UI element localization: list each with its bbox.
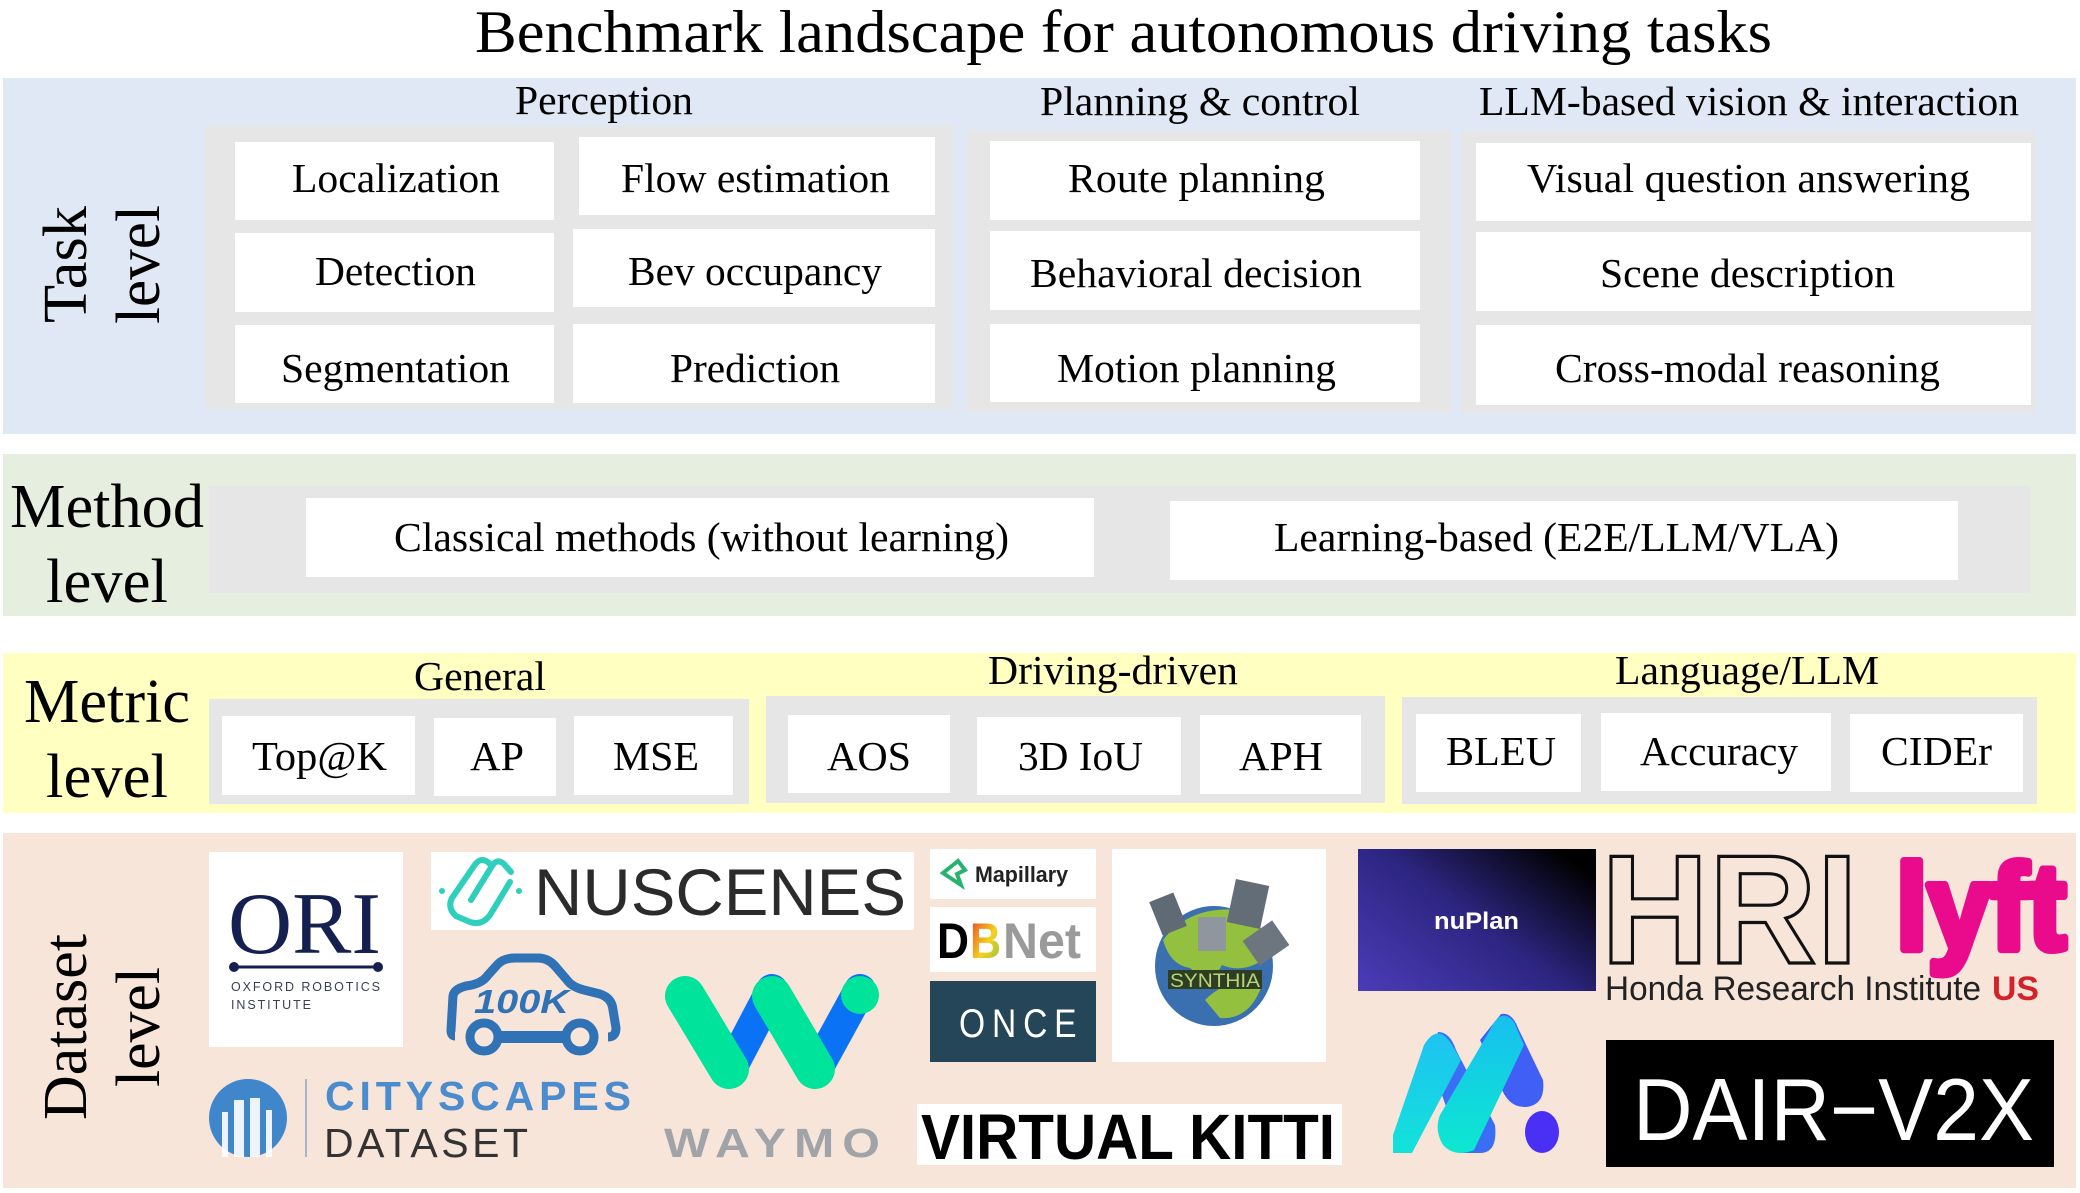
- logo: ORI: [209, 852, 403, 1047]
- group: perception: [206, 77, 953, 409]
- group: LLM-based vision and interaction: Cross-modal reasoning: [1555, 345, 1940, 391]
- group: driving-driven metrics: AOS: [827, 733, 911, 779]
- group: perception: Bev occupancy: [628, 248, 882, 294]
- task level label: [32, 205, 173, 324]
- logo: Waymo: WAYMO: [664, 1120, 880, 1166]
- dataset level label: level: [105, 967, 173, 1087]
- group: language metrics: BLEU: [1446, 728, 1556, 774]
- metric level label: Metric: [24, 668, 190, 736]
- logo: Cityscapes: [209, 1073, 631, 1166]
- panel: metric level: [3, 647, 2076, 813]
- method level label: [10, 473, 204, 616]
- logo: ORI: OXFORD ROBOTICS: [231, 980, 380, 994]
- logo: nuScenes: NUSCENES: [534, 855, 906, 929]
- title: Benchmark landscape for autonomous driving tasks: [475, 0, 1772, 65]
- box: classical methods: Classical methods (without learning): [394, 514, 1009, 560]
- group: perception: Perception: [515, 77, 693, 123]
- logo: BDD100K car: [451, 958, 616, 1051]
- logo: Honda Research Institute: Honda Research Institute: [1605, 970, 1981, 1008]
- dataset level label: Dataset: [32, 934, 100, 1120]
- logo: Synthia: [1112, 849, 1326, 1062]
- group: perception: Prediction: [670, 345, 840, 391]
- group: general metrics: Top@K: [252, 733, 387, 779]
- logo: DBNet: D: [937, 913, 969, 969]
- method level label: Method: [10, 473, 204, 541]
- group: language metrics: [1402, 647, 2037, 804]
- group: LLM-based vision and interaction: Visual question answering: [1527, 155, 1970, 201]
- metric level label: [24, 668, 190, 811]
- group: driving-driven metrics: [766, 647, 1385, 803]
- logo: Lyft: lyft: [1896, 839, 2066, 975]
- method level label: level: [46, 548, 168, 616]
- logo: nuPlan: nuPlan: [1434, 908, 1519, 935]
- group: language metrics: Accuracy: [1640, 728, 1798, 774]
- logo: Honda Research Institute: HRI: [1601, 823, 1858, 996]
- logo: DBNet: B: [970, 913, 1001, 969]
- group: LLM-based vision and interaction: LLM-based vision & interaction: [1479, 78, 2019, 124]
- group: planning and control: Route planning: [1068, 155, 1325, 201]
- group: general metrics: AP: [470, 733, 524, 779]
- box: classical methods: [306, 498, 1094, 577]
- dataset level label: [32, 934, 173, 1120]
- group: perception: Localization: [292, 155, 500, 201]
- logo: BDD100K car: 100K: [474, 983, 572, 1020]
- logo: Mapillary: [930, 849, 1096, 899]
- logo: Honda Research Institute: [1601, 823, 2039, 1008]
- group: planning and control: [967, 78, 1451, 412]
- group: perception: Segmentation: [281, 345, 510, 391]
- panel: method level: [3, 454, 2076, 616]
- group: perception: Flow estimation: [621, 155, 890, 201]
- group: general metrics: MSE: [613, 733, 699, 779]
- logo: M mark: [1393, 1014, 1559, 1153]
- logo: DBNet: Net: [1003, 913, 1081, 969]
- group: perception: Detection: [315, 248, 476, 294]
- box: learning-based: [1170, 501, 1958, 580]
- group: language metrics: CIDEr: [1881, 728, 1992, 774]
- group: driving-driven metrics: 3D IoU: [1018, 733, 1143, 779]
- panel: dataset level: [3, 823, 2076, 1188]
- logo: Waymo: [664, 976, 880, 1166]
- task level label: Task: [32, 206, 100, 323]
- group: language metrics: Language/LLM: [1615, 647, 1879, 693]
- logo: DAIR-V2X: DAIR−V2X: [1633, 1060, 2034, 1159]
- logo: Mapillary: Mapillary: [975, 862, 1069, 887]
- logo: Cityscapes: CITYSCAPES: [325, 1073, 631, 1119]
- group: planning and control: Motion planning: [1057, 345, 1336, 391]
- group: general metrics: [209, 653, 749, 804]
- group: planning and control: Planning & control: [1040, 78, 1360, 124]
- logo: ORI: INSTITUTE: [231, 998, 311, 1012]
- logo: ONCE: ONCE: [959, 1001, 1077, 1046]
- logo: Synthia: SYNTHIA: [1170, 971, 1260, 992]
- logo: DBNet: [930, 907, 1096, 972]
- group: planning and control: Behavioral decision: [1030, 250, 1362, 296]
- box: learning-based: Learning-based (E2E/LLM/VLA): [1274, 514, 1839, 560]
- logo: ONCE: [930, 981, 1096, 1062]
- group: general metrics: General: [414, 653, 546, 699]
- group: LLM-based vision and interaction: Scene description: [1600, 250, 1895, 296]
- group: LLM-based vision and interaction: [1461, 78, 2036, 413]
- panel: task level: [3, 77, 2076, 434]
- logo: Virtual KITTI: VIRTUAL KITTI: [921, 1101, 1335, 1173]
- group: driving-driven metrics: APH: [1239, 733, 1323, 779]
- logo: Honda Research Institute: US: [1992, 970, 2039, 1008]
- logo: nuPlan: [1358, 849, 1596, 991]
- task level label: level: [105, 205, 173, 324]
- group: driving-driven metrics: Driving-driven: [988, 647, 1238, 693]
- logo: ORI: ORI: [228, 876, 381, 973]
- metric level label: level: [46, 743, 168, 811]
- logo: Cityscapes: DATASET: [324, 1120, 528, 1166]
